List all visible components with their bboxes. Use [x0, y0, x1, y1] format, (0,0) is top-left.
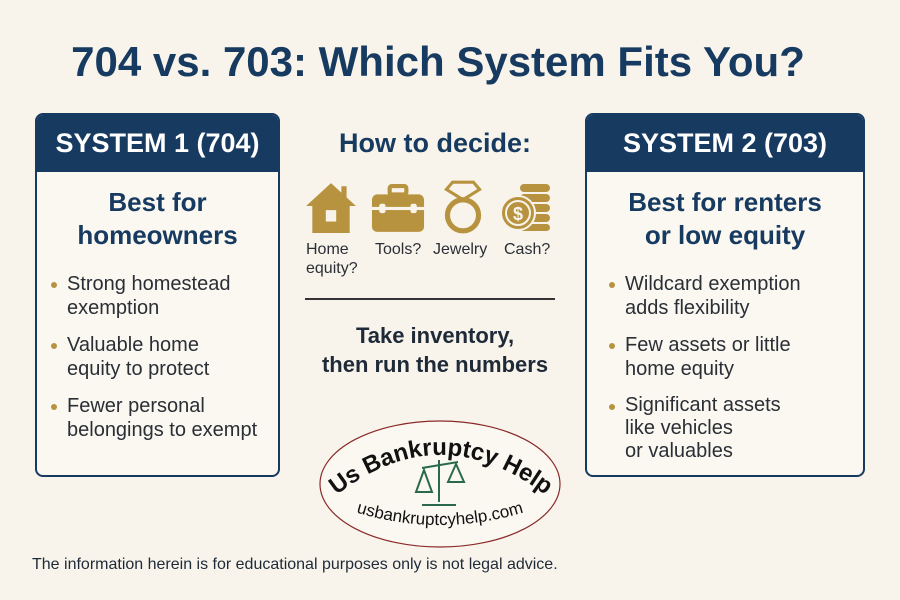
- bullets: system 1: equity to protect: [67, 358, 209, 380]
- subheading: homeowners: homeowners: [77, 220, 238, 250]
- icons row: Tools?: [375, 241, 421, 258]
- icon: coins: [502, 184, 550, 231]
- bullets: system 1: exemption: [67, 297, 159, 319]
- disclaimer: The information herein is for educational purposes only is not legal advice.: [32, 556, 558, 573]
- icon labels: Home: [306, 241, 349, 258]
- icons row: Cash?: [504, 241, 550, 258]
- icons row: [306, 180, 550, 277]
- subheading: renters: Best for renters: [628, 187, 822, 217]
- bullets: system 1: Valuable home: [67, 334, 199, 356]
- icon: toolbox: [372, 184, 424, 232]
- header: system 1: SYSTEM 1 (704): [55, 128, 260, 158]
- header: system 1: [37, 115, 278, 172]
- bullets: system 2: Few assets or little: [625, 334, 791, 356]
- divider: [305, 298, 555, 300]
- subheading: renters: or low equity: [645, 220, 805, 250]
- bullets: system 2: like vehicles: [625, 417, 733, 439]
- icon labels: [306, 241, 358, 277]
- icon labels: equity?: [306, 260, 358, 277]
- logo: usbankruptcyhelp.com: [358, 504, 523, 528]
- title: 704 vs. 703: Which System Fits You?: [71, 38, 805, 85]
- subheading: homeowners: Best for: [108, 187, 207, 217]
- icon: house: [306, 183, 356, 233]
- heading: how to decide: How to decide:: [339, 128, 531, 158]
- bullets: system 2: adds flexibility: [625, 297, 750, 319]
- header: system 2: SYSTEM 2 (703): [623, 128, 827, 158]
- header: system 2: [587, 115, 863, 172]
- bullets: system 2: Significant assets: [625, 394, 781, 416]
- icon: ring: [444, 180, 482, 234]
- text: take inventory: then run the numbers: [322, 352, 548, 377]
- logo: Us Bankruptcy Help: [328, 440, 550, 494]
- logo: [319, 420, 561, 548]
- bullets: system 2: [609, 273, 801, 462]
- bullets: system 1: Fewer personal: [67, 395, 205, 417]
- subheading: renters: [628, 187, 822, 250]
- bullets: system 1: belongings to exempt: [67, 419, 257, 441]
- panel: system 2: [585, 113, 865, 477]
- bullets: system 2: Wildcard exemption: [625, 273, 801, 295]
- text: take inventory: [322, 323, 548, 377]
- icon: coins: $: [513, 204, 523, 224]
- bullets: system 2: or valuables: [625, 440, 733, 462]
- text: take inventory: Take inventory,: [356, 323, 514, 348]
- panel: system 1: [35, 113, 280, 477]
- bullets: system 2: home equity: [625, 358, 734, 380]
- bullets: system 1: [51, 273, 258, 441]
- icons row: Jewelry: [433, 241, 487, 258]
- bullets: system 1: Strong homestead: [67, 273, 230, 295]
- subheading: homeowners: [77, 187, 238, 250]
